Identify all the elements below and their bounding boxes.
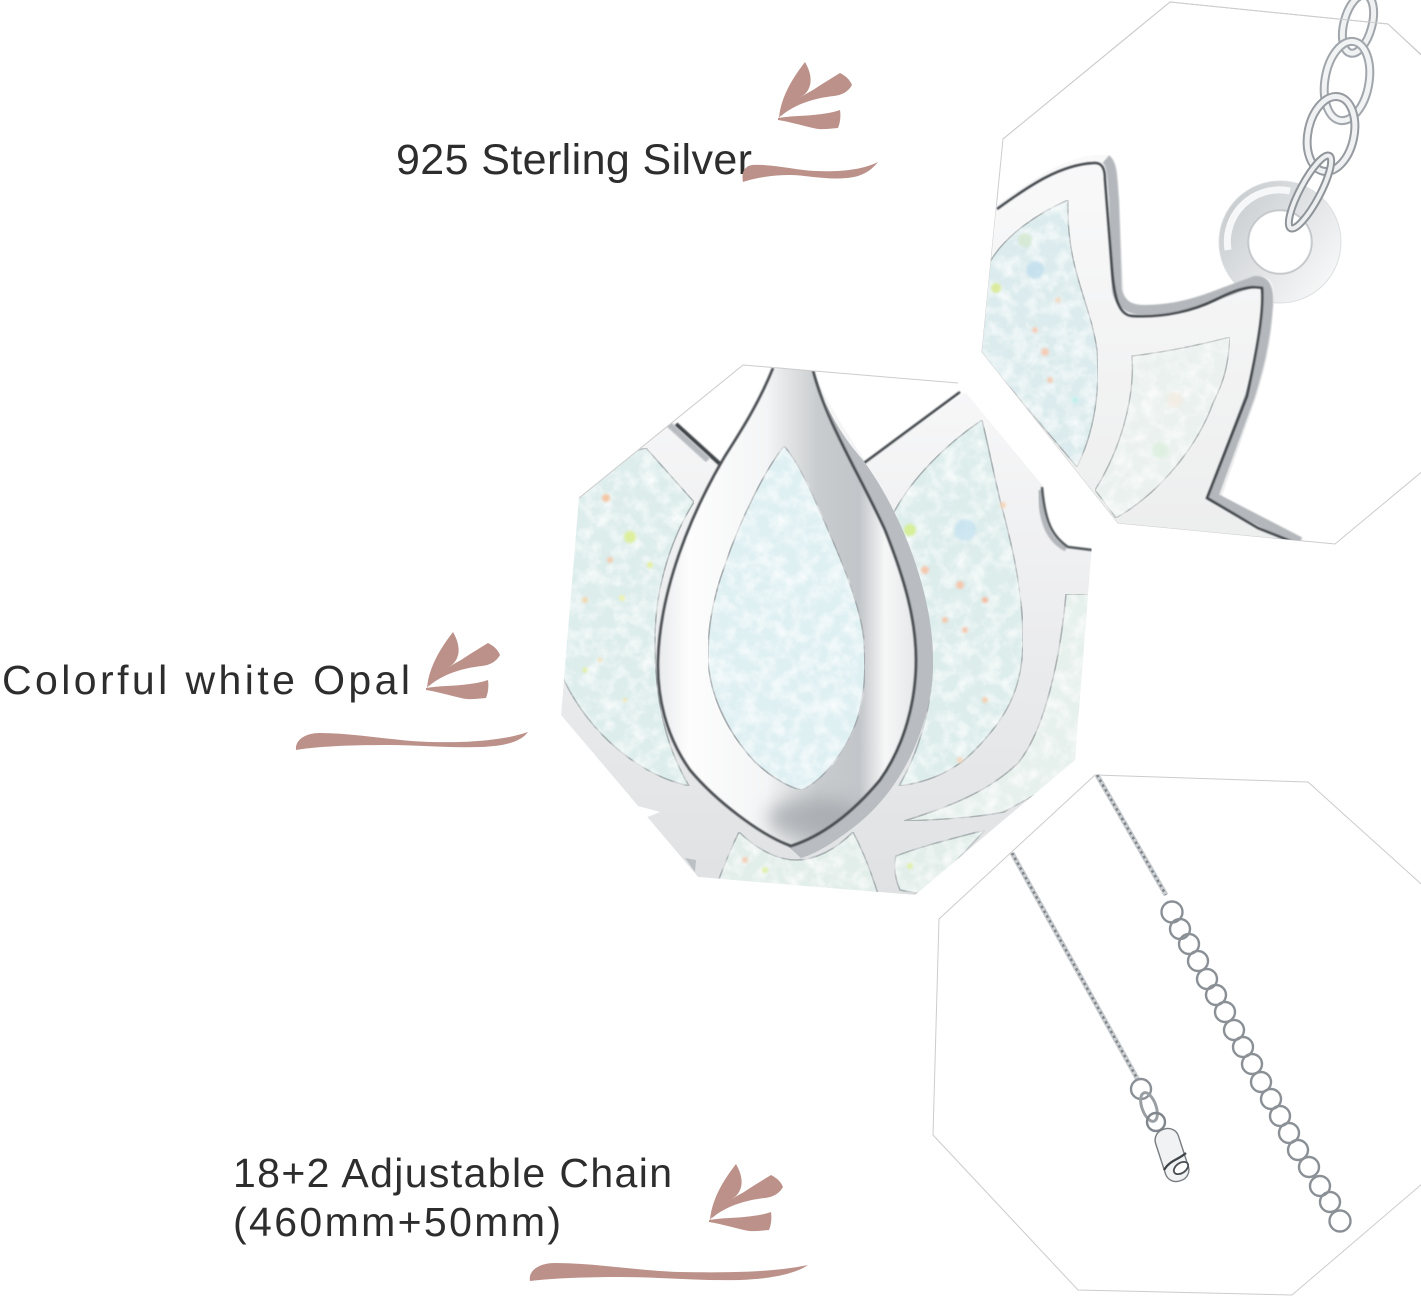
white gap top left	[674, 387, 762, 460]
octagon frame overlay	[1003, 2, 1421, 139]
chain link through the ring	[1282, 151, 1338, 233]
swoosh underline 2	[296, 732, 528, 750]
small ticks	[638, 806, 660, 817]
opal centre drop	[708, 446, 865, 790]
icon: leaf accent 3	[709, 1164, 783, 1231]
drop bottom shading	[767, 798, 863, 838]
opal left petal	[978, 200, 1098, 467]
drop ring	[658, 368, 916, 846]
pendant top petals	[982, 155, 1303, 540]
drop dark outline	[658, 368, 916, 846]
opal bottom right petal	[895, 830, 985, 895]
white gap top right	[822, 387, 964, 460]
arm shadow lines	[676, 424, 720, 464]
chain strand left	[1012, 853, 1138, 1080]
octagon frame: bottom right	[933, 775, 1421, 1295]
octagon outline	[579, 365, 958, 498]
label: chain length in mm: (460mm+50mm)	[233, 1199, 561, 1245]
extender chain	[1162, 902, 1350, 1232]
silver dark edge line	[997, 163, 1300, 545]
icon: leaf accent 2	[426, 632, 500, 699]
opal far right petal	[904, 594, 1095, 821]
chain links	[1301, 0, 1379, 176]
opal lower petal	[1095, 337, 1230, 518]
chain strand right	[1097, 775, 1166, 895]
lobster clasp	[1131, 1079, 1192, 1184]
silver gray outer band	[1106, 159, 1300, 542]
swoosh underline 3	[530, 1263, 808, 1281]
panel: opal pendant close-up	[561, 360, 1100, 900]
opal speckles	[991, 233, 1183, 458]
swoosh underline 1	[742, 162, 878, 182]
opal bottom petal	[718, 832, 878, 892]
label: Colorful white Opal: Colorful white Opal	[2, 657, 410, 703]
label: 925 Sterling Silver: 925 Sterling Silver	[396, 136, 752, 184]
opal right petal	[892, 420, 1023, 786]
drop outer shadow band	[788, 378, 933, 858]
panel: chain and bail detail	[970, 0, 1421, 560]
label: 18+2 Adjustable Chain: 18+2 Adjustable Chain	[233, 1150, 672, 1196]
silver body	[982, 205, 1282, 539]
jump ring	[1227, 190, 1326, 288]
opal speckles	[582, 494, 1006, 873]
white notch right	[1042, 486, 1092, 548]
panel: adjustable chain	[933, 775, 1421, 1295]
opal left petal	[563, 448, 694, 786]
icon: leaf accent 1	[778, 62, 852, 129]
octagon frame: top right	[982, 2, 1421, 544]
silver base	[561, 365, 1092, 895]
